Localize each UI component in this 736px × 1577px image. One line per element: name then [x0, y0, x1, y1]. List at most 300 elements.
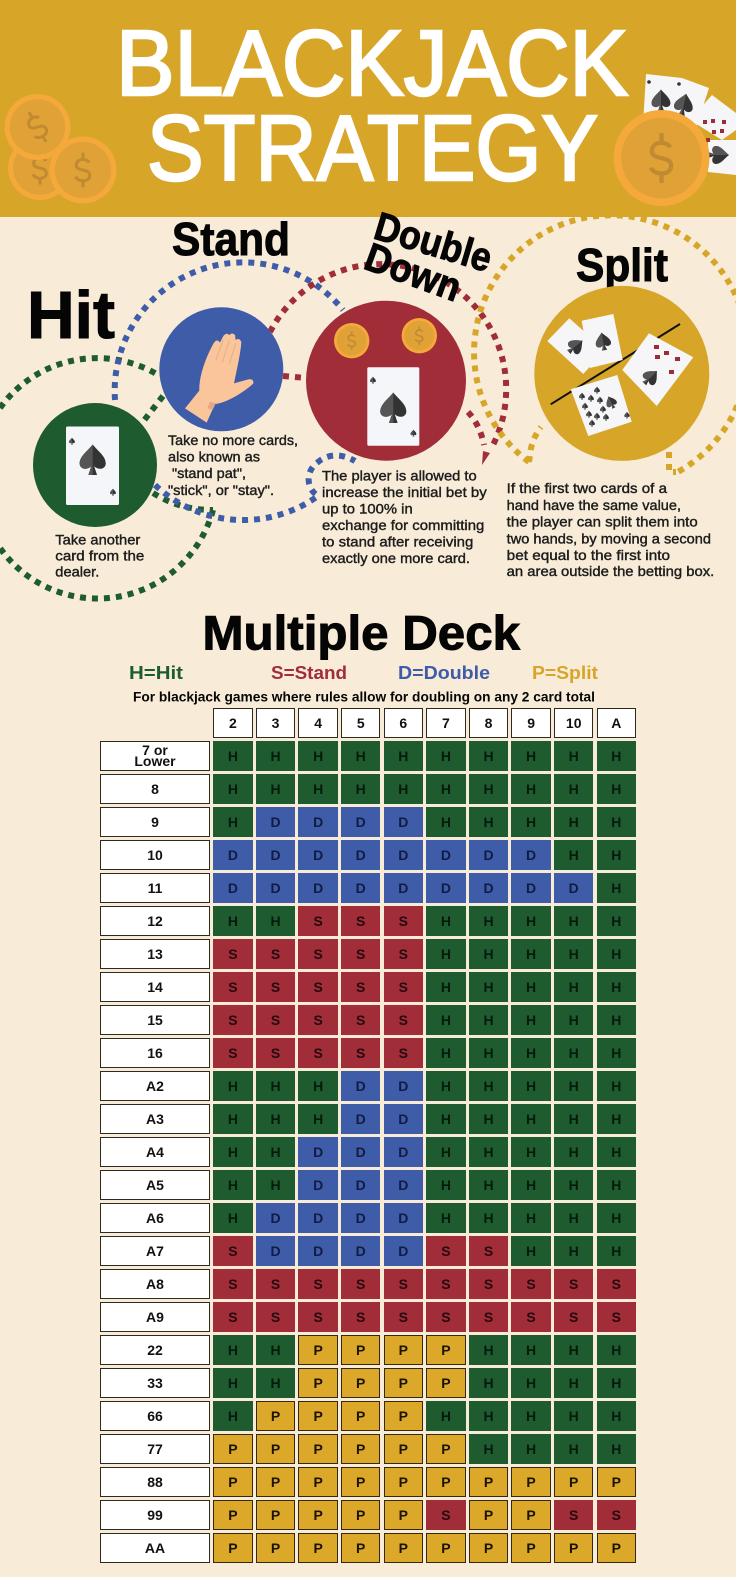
text: hit: card from the [55, 548, 145, 564]
row: 15: H [611, 1012, 621, 1028]
row: 99: P [484, 1507, 493, 1523]
row: 22: 22 [147, 1342, 163, 1358]
row: 33: 33 [147, 1375, 163, 1391]
row: 14: H [611, 979, 621, 995]
row: 12: H [270, 913, 281, 929]
row: AA: P [484, 1540, 493, 1556]
row: 33: P [356, 1375, 365, 1391]
legend: D=Double [398, 662, 490, 683]
row: A7: D [270, 1243, 281, 1259]
panel: hit icon [33, 403, 157, 527]
panel: split icon [534, 286, 709, 461]
row: 88: P [399, 1474, 408, 1490]
row: 8: 8 [151, 781, 159, 797]
row: A8: S [228, 1276, 238, 1292]
row: A9: S [313, 1309, 323, 1325]
row: A9: S [228, 1309, 238, 1325]
row: 11: D [228, 880, 238, 896]
row: 9: H [526, 814, 536, 830]
row: A2: H [526, 1078, 536, 1094]
row: 10: D [356, 847, 366, 863]
row: A6: H [569, 1210, 579, 1226]
row: 99: P [271, 1507, 280, 1523]
icon: right cards and coin [614, 74, 736, 206]
row: A4: H [569, 1144, 579, 1160]
row: 7 or lower: 7 or [142, 742, 168, 758]
row: 12: H [611, 913, 621, 929]
table header: dealer cards: 6 [399, 715, 407, 731]
row: 9: H [441, 814, 451, 830]
row: A3: H [313, 1111, 323, 1127]
row: 22: H [611, 1342, 621, 1358]
row: AA: P [399, 1540, 408, 1556]
row: 8: H [398, 781, 408, 797]
row: A3: H [526, 1111, 536, 1127]
row: 22: H [526, 1342, 536, 1358]
row: A8: S [526, 1276, 536, 1292]
row: 11: D [569, 880, 579, 896]
row: 22: H [569, 1342, 579, 1358]
row: 88: P [441, 1474, 451, 1490]
row: A2: D [398, 1078, 408, 1094]
text: stand: "stick", or "stay". [168, 482, 274, 498]
title: STRATEGY [147, 96, 598, 200]
row: 9: D [398, 814, 408, 830]
row: A2: D [356, 1078, 366, 1094]
row: A6: H [483, 1210, 494, 1226]
row: A6 [100, 1203, 636, 1233]
row: 15: S [399, 1012, 408, 1028]
row: 15: H [483, 1012, 494, 1028]
row: A9: S [441, 1309, 451, 1325]
row: 16: S [399, 1045, 408, 1061]
row: 16: 16 [147, 1045, 163, 1061]
row: 15: S [313, 1012, 323, 1028]
row: A2 [100, 1071, 636, 1101]
row: 14: S [271, 979, 280, 995]
row: A2: H [228, 1078, 238, 1094]
row: 33: P [441, 1375, 451, 1391]
row: A3: D [398, 1111, 408, 1127]
row: A3: H [569, 1111, 579, 1127]
row: 77: P [313, 1441, 323, 1457]
row: A9: S [526, 1309, 536, 1325]
row: 88: P [484, 1474, 493, 1490]
table header: dealer cards: 3 [272, 715, 279, 731]
row: A3: H [611, 1111, 621, 1127]
legend: S=Stand [271, 662, 347, 683]
row: A5: H [611, 1177, 621, 1193]
row: 11: D [313, 880, 323, 896]
row: 15 [100, 1005, 636, 1035]
row: A8: S [612, 1276, 621, 1292]
row: 77: H [569, 1441, 579, 1457]
row: A5: D [356, 1177, 366, 1193]
row: 14: S [399, 979, 408, 995]
text: split [507, 480, 714, 579]
row: A6: D [356, 1210, 366, 1226]
heading: Hit: Hit [27, 278, 115, 353]
text: hit: Take another [55, 531, 141, 547]
row: 22 [100, 1335, 636, 1365]
row: 77: P [441, 1441, 451, 1457]
dotted ring: split [474, 215, 736, 474]
row: 66: H [483, 1408, 494, 1424]
row: 8: H [483, 781, 494, 797]
row: 88: 88 [147, 1474, 163, 1490]
row: A2: H [313, 1078, 323, 1094]
row: 33: P [313, 1375, 323, 1391]
table header: dealer cards [213, 708, 636, 738]
table header: dealer cards: 9 [527, 715, 535, 731]
row: A8 [100, 1269, 636, 1299]
text: hit: dealer. [55, 564, 99, 580]
strategy table [100, 708, 636, 1563]
text: stand: Take no more cards, [168, 432, 298, 448]
row: 77: P [228, 1441, 238, 1457]
row: 11: 11 [148, 880, 162, 896]
row: 12: 12 [147, 913, 163, 929]
row: 10: 10 [147, 847, 163, 863]
row: A8: S [441, 1276, 451, 1292]
row: A2: A2 [146, 1078, 164, 1094]
row: A7: H [611, 1243, 621, 1259]
row: 14: 14 [147, 979, 163, 995]
table header: dealer cards: A [611, 715, 621, 731]
row: A7 [100, 1236, 636, 1266]
row: 9 [100, 807, 636, 837]
row: 13: H [569, 946, 579, 962]
row: 16 [100, 1038, 636, 1068]
row: AA: P [441, 1540, 451, 1556]
text: stand: "stand pat", [172, 465, 246, 481]
row: 7 or lower: Lower [134, 753, 176, 769]
row: 10: D [228, 847, 238, 863]
row: 77 [100, 1434, 636, 1464]
row: 15: H [441, 1012, 451, 1028]
row: A3: H [270, 1111, 281, 1127]
row: 99: S [441, 1507, 451, 1523]
row: 8: H [569, 781, 579, 797]
text: double down: exchange for committing [322, 517, 484, 533]
row: 8: H [611, 781, 621, 797]
row: 8: H [270, 781, 281, 797]
row: A5: H [228, 1177, 238, 1193]
row: 77: H [483, 1441, 494, 1457]
row: A4: H [228, 1144, 238, 1160]
row: 77: 77 [147, 1441, 163, 1457]
row: A8: S [271, 1276, 280, 1292]
row: A5: H [526, 1177, 536, 1193]
row: 15: H [526, 1012, 536, 1028]
row: 88: P [228, 1474, 238, 1490]
infographic artwork [0, 0, 736, 705]
row: 10 [100, 840, 636, 870]
table header: dealer cards: 10 [566, 715, 581, 731]
text: double down: up to 100% in [322, 500, 413, 516]
heading: Stand: Stand [172, 213, 290, 265]
row: 66: H [611, 1408, 621, 1424]
row: 12: H [441, 913, 451, 929]
row: 33: H [228, 1375, 238, 1391]
row: 7 or lower: H [356, 748, 366, 764]
row: 16: S [356, 1045, 365, 1061]
title: BLACKJACK [116, 11, 628, 115]
heading: Double Down: Double [369, 204, 497, 281]
legend: H=Hit [129, 662, 183, 683]
row: A7: S [228, 1243, 238, 1259]
row: 33: P [399, 1375, 408, 1391]
row: 88: P [356, 1474, 365, 1490]
row: 13: H [441, 946, 451, 962]
row: 66: P [399, 1408, 408, 1424]
row: 7 or lower: H [441, 748, 451, 764]
row: 22: H [270, 1342, 281, 1358]
row: 7 or lower: H [569, 748, 579, 764]
dotted ring: hit [0, 358, 213, 599]
row: A9: S [271, 1309, 280, 1325]
row: 33: H [483, 1375, 494, 1391]
row: A6: H [228, 1210, 238, 1226]
row: A5: H [270, 1177, 281, 1193]
row: 7 or lower: H [228, 748, 238, 764]
row: 15: S [356, 1012, 365, 1028]
row: 77: H [611, 1441, 621, 1457]
row: A7: D [398, 1243, 408, 1259]
row: 66: P [271, 1408, 280, 1424]
row: A8: S [484, 1276, 493, 1292]
row: 10: D [398, 847, 408, 863]
row: AA: P [526, 1540, 536, 1556]
row: AA: AA [145, 1540, 165, 1556]
row: 9: H [611, 814, 621, 830]
row: 7 or lower: H [270, 748, 281, 764]
row: 22: P [356, 1342, 365, 1358]
row: 10: H [569, 847, 579, 863]
row: AA: P [271, 1540, 280, 1556]
row: 16: S [313, 1045, 323, 1061]
row: 88: P [569, 1474, 578, 1490]
row: 77: H [526, 1441, 536, 1457]
row: 11: D [270, 880, 281, 896]
row: A4: H [483, 1144, 494, 1160]
row: 33: H [611, 1375, 621, 1391]
row: 11: D [356, 880, 366, 896]
row: AA: P [356, 1540, 365, 1556]
row: 15: S [228, 1012, 238, 1028]
row: A9: S [356, 1309, 365, 1325]
row: 13: S [356, 946, 365, 962]
row: A5: D [398, 1177, 408, 1193]
row: A5: A5 [146, 1177, 164, 1193]
row: 15: H [569, 1012, 579, 1028]
row: 9: H [569, 814, 579, 830]
row: A2: H [270, 1078, 281, 1094]
row: 12: S [399, 913, 408, 929]
row: 99: S [569, 1507, 578, 1523]
row: 9: H [483, 814, 494, 830]
header band [0, 0, 736, 217]
row: A3: H [441, 1111, 451, 1127]
row: 10: D [483, 847, 494, 863]
row: 9: H [228, 814, 238, 830]
row: A7: H [569, 1243, 579, 1259]
row: 33: H [569, 1375, 579, 1391]
row: 8: H [441, 781, 451, 797]
row: A5: H [441, 1177, 451, 1193]
row: 99: P [356, 1507, 365, 1523]
row: AA: P [569, 1540, 578, 1556]
row: 10: D [441, 847, 451, 863]
row: 11: D [526, 880, 536, 896]
row: 14: H [569, 979, 579, 995]
row: AA: P [612, 1540, 621, 1556]
row: 15: 15 [147, 1012, 163, 1028]
row: 99: P [228, 1507, 238, 1523]
row: 7 or lower: H [526, 748, 536, 764]
row: A8: S [313, 1276, 323, 1292]
row: 88: P [313, 1474, 323, 1490]
row: 12: S [356, 913, 365, 929]
legend [129, 662, 598, 683]
row: 66: P [356, 1408, 365, 1424]
row: A9: S [399, 1309, 408, 1325]
row: 66: H [228, 1408, 238, 1424]
row: 7 or lower: H [313, 748, 323, 764]
row: 66: H [526, 1408, 536, 1424]
text: double down: increase the initial bet by [322, 484, 487, 500]
text: split: two hands, by moving a second [507, 530, 711, 546]
row: A3: D [356, 1111, 366, 1127]
row: 99: P [313, 1507, 323, 1523]
row: A3: H [483, 1111, 494, 1127]
text: split: the player can split them into [507, 514, 698, 530]
row: 22: P [399, 1342, 408, 1358]
row: 13: S [228, 946, 238, 962]
row: 66: H [441, 1408, 451, 1424]
row: 22: H [228, 1342, 238, 1358]
row: 14: H [483, 979, 494, 995]
row: A8: S [356, 1276, 365, 1292]
text: split: an area outside the betting box. [507, 563, 714, 579]
row: A4: A4 [146, 1144, 164, 1160]
row: A8: S [569, 1276, 578, 1292]
row: A7: S [441, 1243, 451, 1259]
row: 77: P [399, 1441, 408, 1457]
row: 11: D [483, 880, 494, 896]
text: double down: to stand after receiving [322, 534, 473, 550]
row: 66: H [569, 1408, 579, 1424]
row: A9: S [569, 1309, 578, 1325]
row: A7: H [526, 1243, 536, 1259]
row: 88: P [271, 1474, 280, 1490]
row: 9: 9 [151, 814, 159, 830]
row: A6: D [313, 1210, 323, 1226]
row: 66: 66 [147, 1408, 163, 1424]
row: 33: H [526, 1375, 536, 1391]
heading: Double Down: Down [359, 235, 467, 310]
row: 10: D [313, 847, 323, 863]
row: 13: S [271, 946, 280, 962]
row: 7 or lower: H [483, 748, 494, 764]
row: 13: H [483, 946, 494, 962]
row: A6: A6 [146, 1210, 164, 1226]
row: A6: H [611, 1210, 621, 1226]
row: A5: D [313, 1177, 323, 1193]
row: 16: S [271, 1045, 280, 1061]
table header: dealer cards: 8 [485, 715, 492, 731]
row: A6: D [398, 1210, 408, 1226]
row: 14: S [228, 979, 238, 995]
row: 11: D [441, 880, 451, 896]
row: A7: D [313, 1243, 323, 1259]
row: 7 or lower: H [611, 748, 621, 764]
row: A7: A7 [146, 1243, 164, 1259]
row: 10: H [611, 847, 621, 863]
panel: stand icon [159, 307, 283, 431]
row: 16: H [526, 1045, 536, 1061]
legend: P=Split [532, 662, 598, 683]
table header: dealer cards: 5 [357, 715, 365, 731]
row: 8: H [526, 781, 536, 797]
row: A5: H [483, 1177, 494, 1193]
row: 14: S [356, 979, 365, 995]
row: A9: S [484, 1309, 493, 1325]
row: 15: S [271, 1012, 280, 1028]
row: 13: S [313, 946, 323, 962]
row: 22: P [441, 1342, 451, 1358]
row: A7: D [356, 1243, 366, 1259]
row: 88 [100, 1467, 636, 1497]
row: 12: H [483, 913, 494, 929]
row: A3: H [228, 1111, 238, 1127]
text: split: If the first two cards of a [507, 480, 667, 496]
row: 9: D [270, 814, 281, 830]
table header: dealer cards: 2 [229, 715, 237, 731]
row: A4 [100, 1137, 636, 1167]
row: 13: H [526, 946, 536, 962]
row: 12: H [526, 913, 536, 929]
row: 14 [100, 972, 636, 1002]
row: 7 or lower [100, 741, 636, 771]
row: 99: 99 [147, 1507, 163, 1523]
row: AA: P [228, 1540, 238, 1556]
row: 14: H [441, 979, 451, 995]
row: 13: H [611, 946, 621, 962]
row: 88: P [612, 1474, 621, 1490]
row: 22: P [313, 1342, 323, 1358]
row: 11: H [611, 880, 621, 896]
row: A4: H [270, 1144, 281, 1160]
text: hit [55, 531, 145, 580]
text: stand [168, 432, 298, 498]
dotted ring: double down [270, 264, 506, 465]
row: 9: D [313, 814, 323, 830]
row: 7 or lower: H [398, 748, 408, 764]
row: A3: A3 [146, 1111, 164, 1127]
text: stand: also known as [168, 449, 260, 465]
row: A8: A8 [146, 1276, 164, 1292]
row: 16: H [441, 1045, 451, 1061]
row: 16: S [228, 1045, 238, 1061]
row: 11: D [398, 880, 408, 896]
text: double down: exactly one more card. [322, 550, 470, 566]
row: 11 [100, 873, 636, 903]
row: 12: H [569, 913, 579, 929]
row: A4: D [398, 1144, 408, 1160]
row: A4: D [356, 1144, 366, 1160]
row: 9: D [356, 814, 366, 830]
